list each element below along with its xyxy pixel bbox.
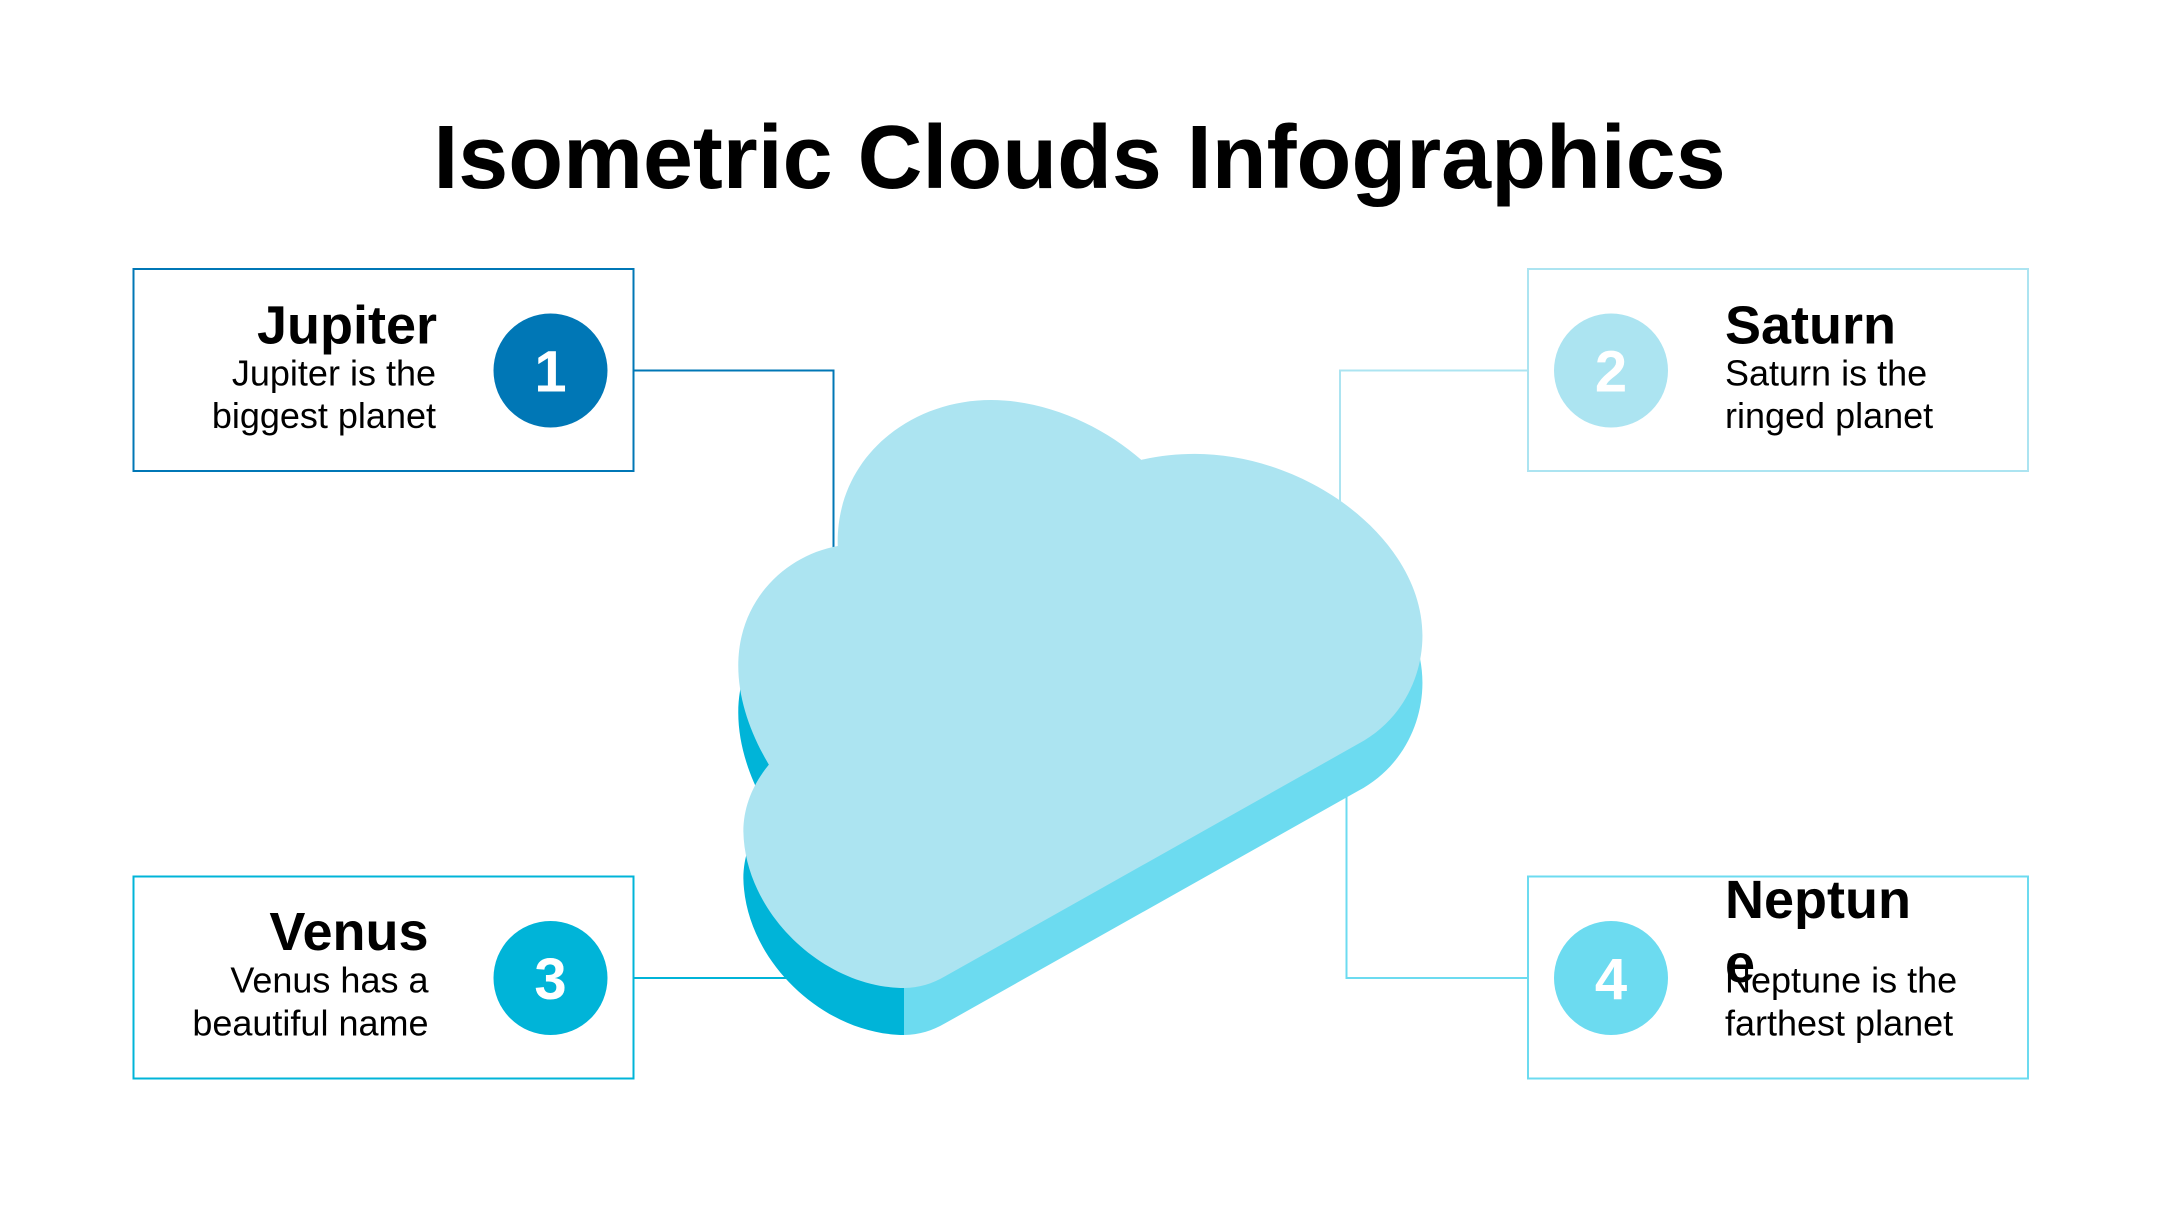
Saturn heading: Saturn — [1725, 296, 1896, 356]
panel: Saturn — [1528, 269, 2028, 471]
Venus heading: Venus — [269, 902, 428, 962]
connector: Jupiter to cloud — [633, 370, 834, 570]
Neptune description: farthest planet — [1725, 1002, 1953, 1044]
Jupiter heading: Jupiter — [257, 296, 437, 356]
panel: Neptune — [1528, 870, 2028, 1078]
icon: number 1 — [494, 314, 608, 428]
isometric cloud — [738, 400, 1422, 1035]
Jupiter description: Jupiter is the — [232, 352, 436, 394]
icon: number 2: 2 — [1595, 340, 1627, 404]
cloud side: dark — [738, 689, 904, 1035]
icon: number 3 — [494, 921, 608, 1035]
icon: number 1: 1 — [534, 340, 567, 404]
Neptune heading: e — [1725, 934, 1755, 994]
Neptune description: Neptune is the — [1725, 960, 1957, 1000]
icon: number 3: 3 — [534, 947, 567, 1012]
icon: number 4 — [1554, 921, 1668, 1035]
Saturn description: ringed planet — [1725, 395, 1933, 436]
cloud top — [738, 400, 1422, 988]
connector: Venus to cloud — [633, 977, 800, 979]
icon: number 4: 4 — [1595, 947, 1627, 1012]
connector: Neptune to cloud — [1346, 790, 1528, 978]
panel: Venus — [134, 876, 634, 1078]
Venus description: Venus has a — [230, 960, 428, 1000]
icon: number 2 — [1554, 314, 1668, 428]
connector: Saturn to cloud — [1340, 370, 1528, 520]
panel: Jupiter — [134, 269, 634, 471]
title: Isometric Clouds Infographics — [433, 108, 1726, 208]
Venus description: beautiful name — [192, 1002, 428, 1044]
Jupiter description: biggest planet — [212, 395, 436, 436]
Saturn description: Saturn is the — [1725, 352, 1927, 394]
Neptune heading: Neptun — [1725, 870, 1911, 930]
cloud side: light — [904, 659, 1422, 1035]
